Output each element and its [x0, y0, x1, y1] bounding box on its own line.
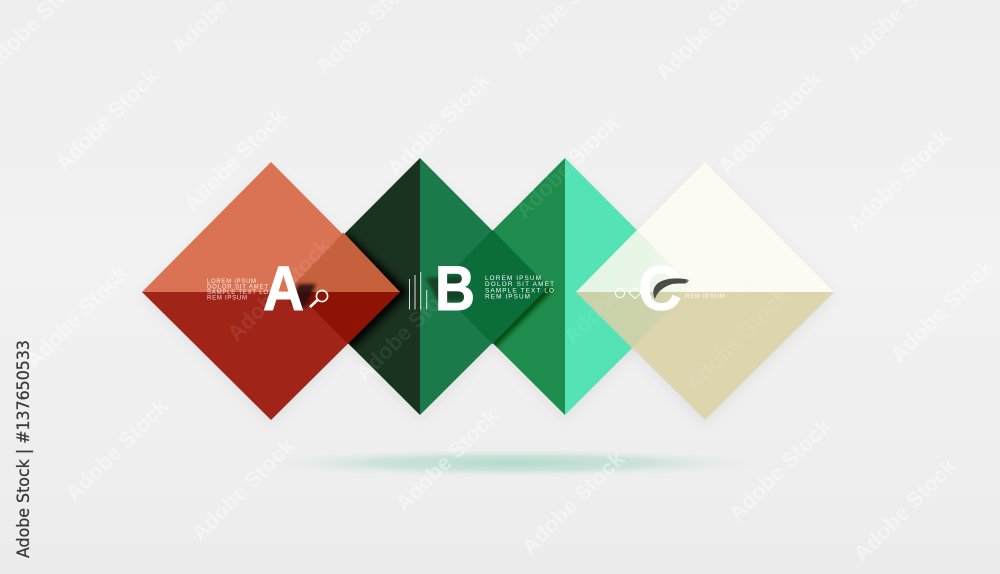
panel: diamond C (cream)	[576, 162, 834, 420]
text: lorem C: LOREM IPSUM	[686, 275, 734, 281]
watermark grid: Adobe Stock	[178, 103, 292, 216]
panel: diamond B left (dark green)	[292, 158, 548, 415]
side credit: Adobe Stock | #137650533	[14, 340, 34, 558]
letter shadow B	[426, 276, 464, 301]
text: lorem A: DOLOR SIT AMET	[207, 284, 268, 290]
shadow cast by red diamond	[344, 231, 409, 350]
letter C: C	[638, 254, 682, 324]
watermark grid: Adobe Stock	[510, 110, 624, 223]
letter shadow C	[653, 278, 689, 299]
block C: letter, text and icon	[615, 254, 746, 324]
text: lorem C: REM IPSUM	[685, 294, 725, 300]
text: lorem B: SAMPLE TEXT LO	[485, 288, 554, 294]
text: lorem B: REM IPSUM	[485, 294, 530, 300]
text: lorem A	[207, 279, 268, 302]
watermark grid: Adobe Stock	[680, 283, 794, 396]
text: lorem C: SAMPLE TEXT LO	[686, 287, 746, 293]
text: lorem A: REM IPSUM	[207, 296, 247, 302]
watermark grid: Adobe Stock	[20, 260, 134, 373]
watermark grid: Adobe Stock	[848, 453, 962, 566]
infographic canvas	[16, 158, 834, 558]
watermark grid: Adobe Stock	[723, 413, 837, 526]
letter shadow A	[291, 284, 316, 308]
icon: magnifier	[310, 290, 328, 307]
letter B: B	[435, 254, 475, 324]
block B: letter, text and icon	[410, 254, 554, 324]
soft shadows behind diamonds	[142, 162, 834, 425]
watermark grid: Adobe Stock	[558, 236, 672, 349]
text: lorem A: SAMPLE TEXT LO	[207, 290, 268, 296]
text: lorem C	[685, 275, 746, 300]
text: lorem B: DOLOR SIT AMET	[485, 281, 554, 288]
icon: bars	[410, 272, 427, 310]
watermark grid: Adobe Stock	[841, 124, 955, 237]
watermark grid: Adobe Stock	[186, 433, 300, 546]
watermark grid: Adobe Stock	[390, 403, 504, 516]
watermark grid: Adobe Stock	[382, 68, 496, 181]
panel: diamond A (red)	[142, 162, 400, 420]
watermark grid: Adobe Stock	[222, 233, 336, 346]
shadow cast on mint-green diamond	[486, 282, 553, 349]
watermark grid: Adobe Stock	[885, 254, 999, 367]
watermark grid: Adobe Stock	[50, 63, 164, 176]
text: lorem B: LOREM IPSUM	[485, 275, 541, 282]
panel: diamond B right (green and mint)	[436, 158, 694, 415]
letter A: A	[263, 254, 304, 324]
floor shadow	[240, 448, 784, 478]
watermark grid: Adobe Stock	[60, 393, 174, 506]
text: lorem C: DOLOR SIT AMET	[686, 281, 746, 287]
watermark grid: Adobe Stock	[516, 446, 630, 559]
text: lorem A: LOREM IPSUM	[207, 279, 256, 285]
text: lorem B	[485, 275, 554, 300]
watermark grid: Adobe Stock	[713, 66, 827, 179]
icon: circle and diamond	[615, 288, 641, 298]
watermark grid	[230, 166, 626, 474]
watermark grid: Adobe Stock	[350, 273, 464, 386]
block A: letter, text and icon	[207, 254, 328, 324]
